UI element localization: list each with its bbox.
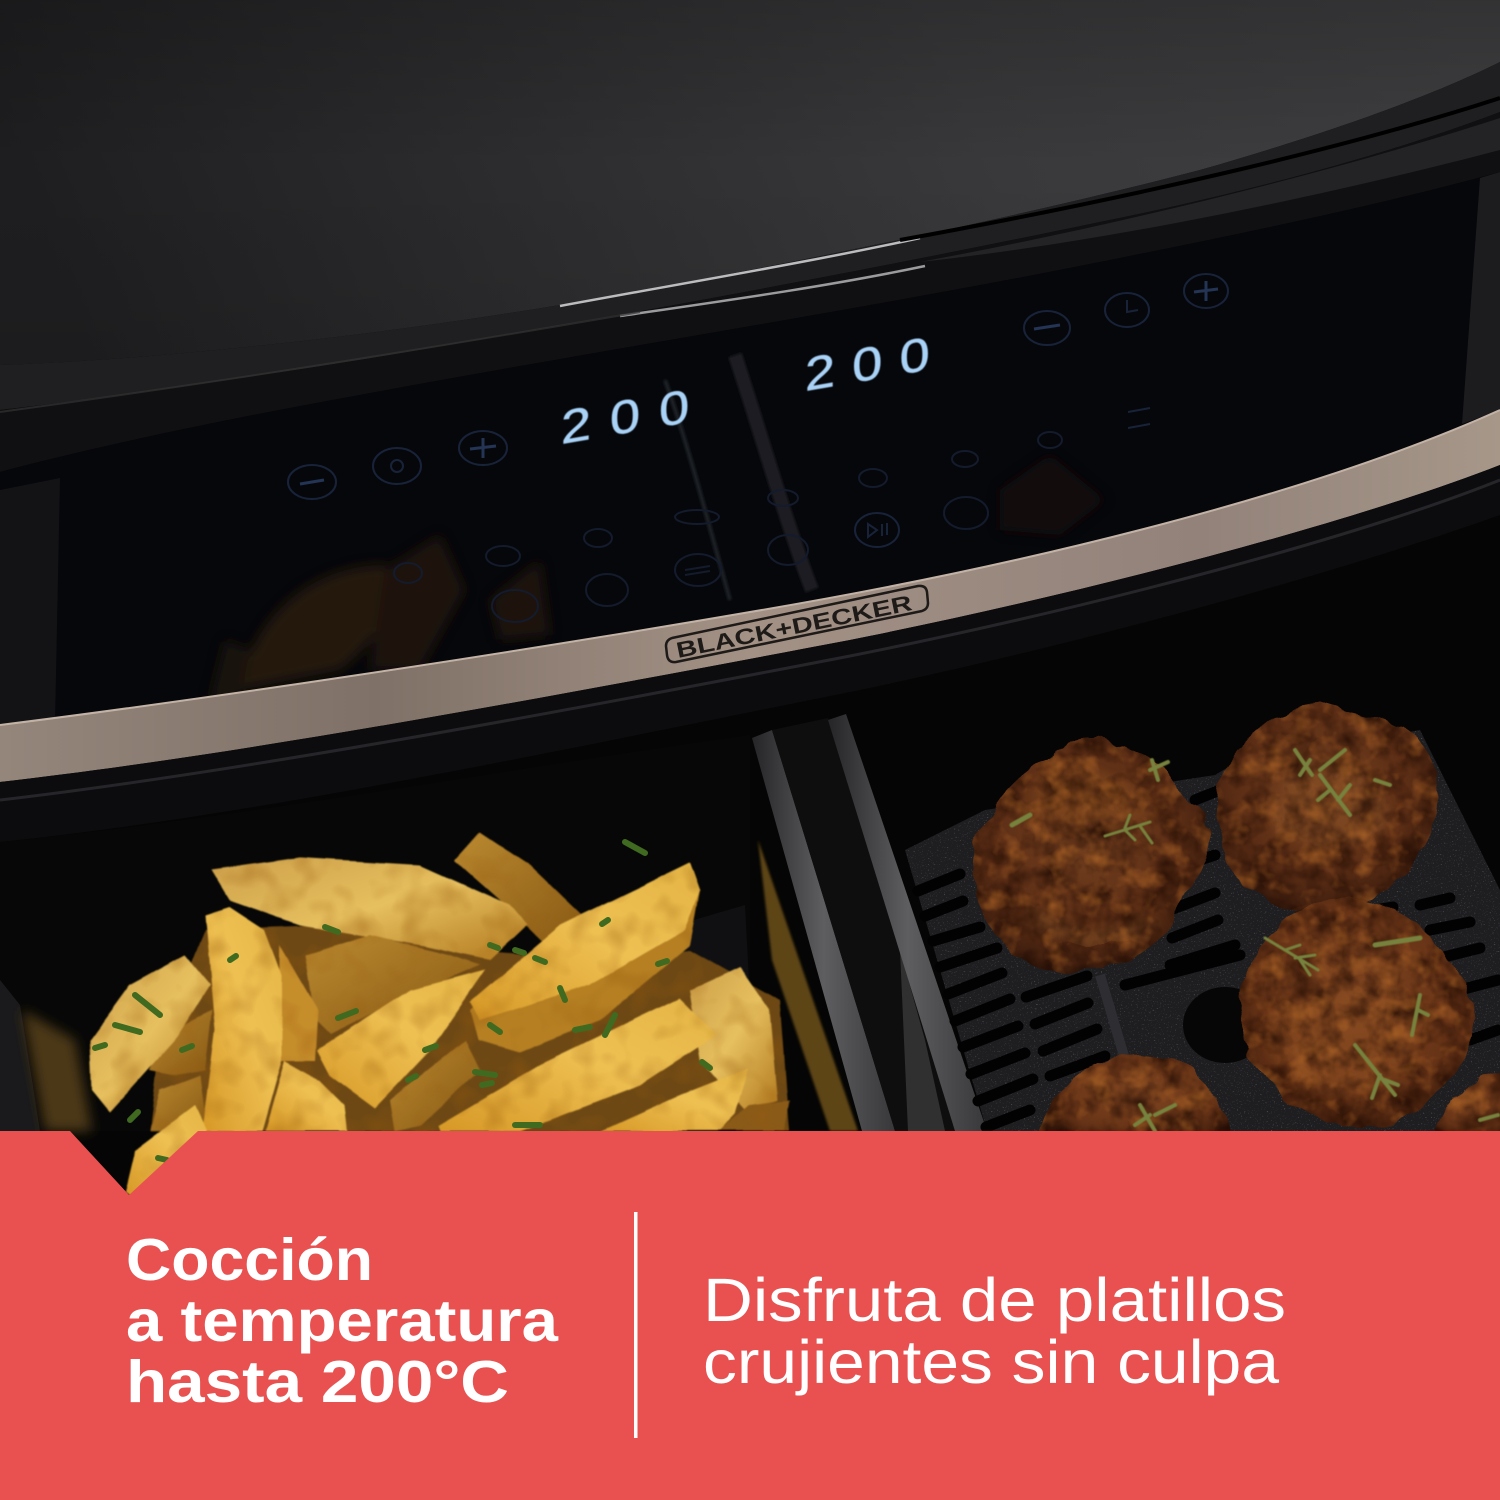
temperature display left: 200: 200 (561, 376, 708, 454)
meatball top left (972, 738, 1209, 972)
meatball top right (1216, 702, 1438, 912)
thyme garnish on meatballs (1012, 750, 1498, 1131)
lid rim with chrome reflections (0, 62, 1500, 472)
meatball lower right (1238, 897, 1475, 1127)
heading: cooking temperature: hasta 200°C (126, 1349, 509, 1415)
meatball bottom centre (1038, 1054, 1235, 1140)
air fryer rack (905, 730, 1500, 1131)
champagne metal strip (0, 410, 1500, 782)
potato wedges (90, 832, 790, 1196)
drawer: divider rails (752, 714, 987, 1131)
tagline: crujientes sin culpa (703, 1328, 1279, 1396)
brand badge: BLACK+DECKER (666, 586, 928, 663)
reflection of food in the glass (210, 455, 1105, 700)
tagline (703, 1266, 1286, 1396)
brand badge: BLACK+DECKER: BLACK+DECKER (674, 590, 914, 663)
divider (634, 1212, 638, 1438)
air fryer lid (0, 0, 1500, 365)
drawer: left basket interior (0, 735, 750, 1131)
parsley garnish on potatoes (95, 842, 710, 1160)
heading: cooking temperature: a temperatura (126, 1288, 559, 1354)
control panel glass (0, 172, 1500, 725)
lower housing black band (0, 465, 1500, 842)
heading: cooking temperature: Cocción (126, 1227, 373, 1293)
tagline: Disfruta de platillos (703, 1266, 1286, 1334)
meatball bottom right (1432, 1072, 1500, 1140)
heading: cooking temperature (126, 1227, 559, 1415)
touch controls, right panel (768, 274, 1228, 565)
temperature display right: 200: 200 (805, 324, 947, 401)
touch controls, left panel (288, 431, 721, 622)
red banner with notch (0, 1131, 1500, 1500)
